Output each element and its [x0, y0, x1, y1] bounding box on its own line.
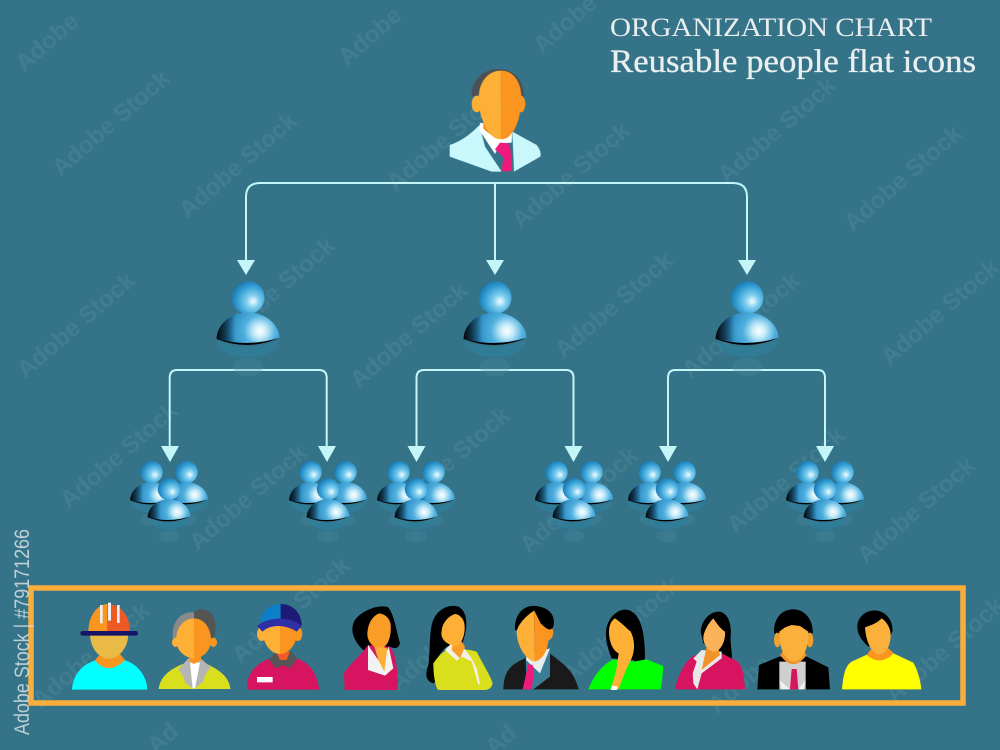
subtitle: Reusable people flat icons — [610, 44, 976, 80]
arrowheads — [161, 260, 834, 462]
text: Adobe Stock — [550, 247, 679, 364]
text: Adobe — [333, 2, 407, 71]
title — [610, 13, 976, 80]
text: Adobe Stock — [722, 422, 851, 539]
text: Adobe Stock — [55, 397, 184, 514]
icon: delivery worker with cap — [247, 604, 319, 690]
text: Adobe Stock — [382, 80, 511, 197]
third level: teams — [130, 461, 864, 542]
icon: top manager — [450, 69, 541, 172]
second level: managers — [216, 281, 779, 376]
text: Adobe Stock — [507, 117, 636, 234]
text: Adobe Stock — [839, 120, 968, 237]
text: Adobe Stock — [47, 65, 176, 182]
icon: woman in lime blouse — [426, 606, 493, 690]
people icons row — [72, 603, 921, 690]
icon: man in black suit and grey shirt — [757, 609, 830, 689]
text: Adobe — [703, 650, 777, 719]
text: Adobe Stock — [12, 267, 141, 384]
icon: man in black suit with pink tie — [503, 606, 579, 689]
text: Adobe Stock — [212, 232, 341, 349]
text: Adobe — [384, 628, 458, 697]
text: Adobe Stock — [174, 107, 303, 224]
text: Adobe Stock — [713, 72, 842, 189]
text: Adobe Stock — [852, 452, 981, 569]
title line: organization chart: ORGANIZATION CHART — [610, 13, 932, 42]
text: Adobe Stock — [345, 277, 474, 394]
frame: people icon row — [31, 588, 963, 703]
org chart connectors — [170, 183, 825, 447]
icon: woman in pink jacket — [344, 606, 400, 690]
text: Adobe Stock — [677, 267, 806, 384]
text: Adobe Stock — [227, 552, 356, 669]
icon: grey-haired woman — [159, 609, 230, 689]
text: Adobe Stock — [27, 597, 156, 714]
text: Adobe Stock — [557, 572, 686, 689]
text: Adobe — [10, 8, 84, 77]
text: Adobe Stock — [387, 402, 516, 519]
icon: woman in green top — [588, 610, 663, 690]
icon: man in yellow t-shirt — [842, 611, 921, 689]
icon: woman in pink blazer — [675, 612, 745, 689]
icon: construction worker — [72, 603, 147, 690]
text: Adobe Stock — [515, 442, 644, 559]
stock id side text: Adobe Stock | #79171266 — [11, 529, 34, 735]
text: Adobe Stock — [184, 439, 313, 556]
